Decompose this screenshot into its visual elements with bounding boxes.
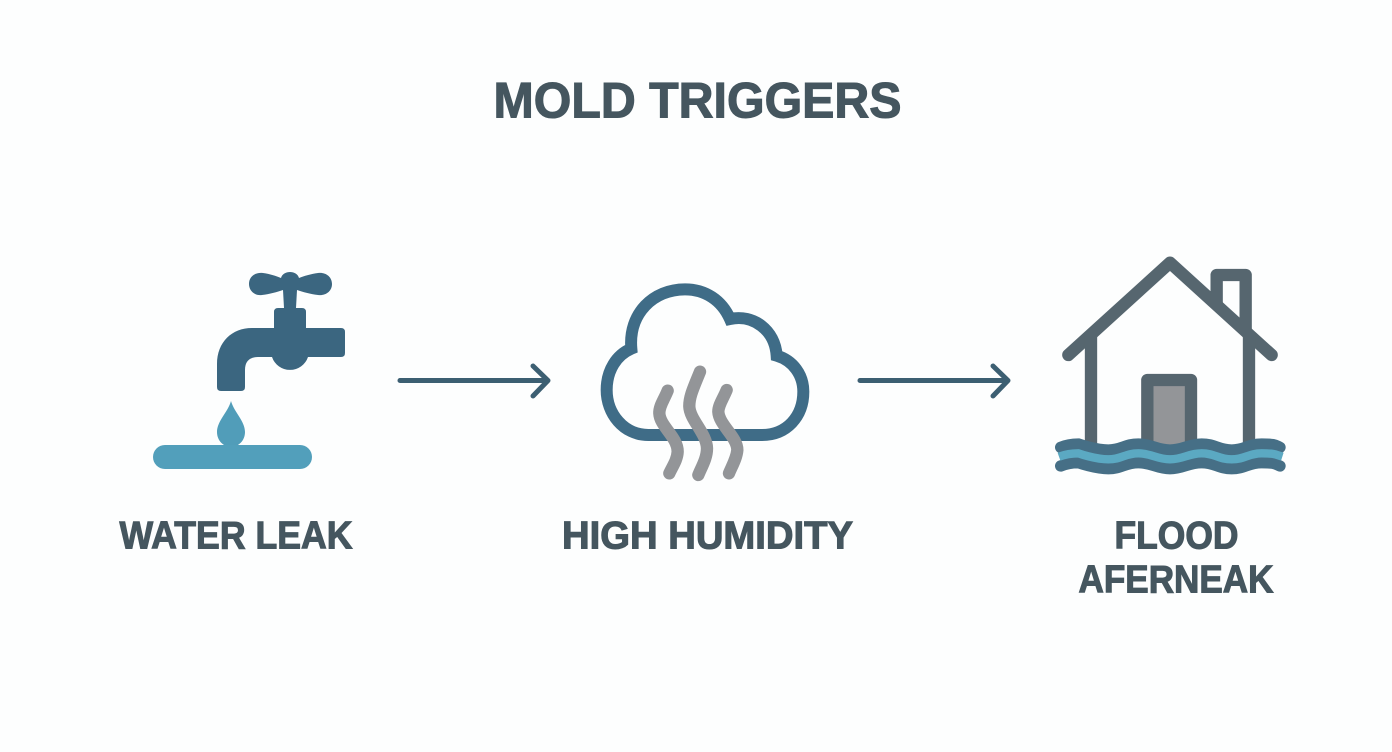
door panel <box>1153 385 1185 445</box>
label: high humidity: HIGH HUMIDITY <box>562 514 853 558</box>
pipe <box>153 445 312 469</box>
water drop <box>217 401 245 447</box>
label: flood aferneak: AFERNEAK <box>1078 558 1274 602</box>
icon: cloud with humidity waves <box>607 289 803 475</box>
faucet <box>217 272 345 391</box>
label: flood aferneak: FLOOD <box>1114 514 1238 558</box>
icon: flooded house <box>1059 263 1282 469</box>
label: flood aferneak <box>1078 514 1274 602</box>
flood water <box>1059 444 1282 469</box>
label: water leak: WATER LEAK <box>120 514 353 558</box>
humidity waves <box>659 372 737 475</box>
title: MOLD TRIGGERS <box>494 72 902 128</box>
cloud outline <box>607 289 803 435</box>
icon: faucet with water drop <box>153 272 345 469</box>
house outline <box>1068 263 1272 445</box>
arrow: leak to humidity <box>400 366 548 396</box>
arrow: humidity to flood <box>860 366 1008 396</box>
